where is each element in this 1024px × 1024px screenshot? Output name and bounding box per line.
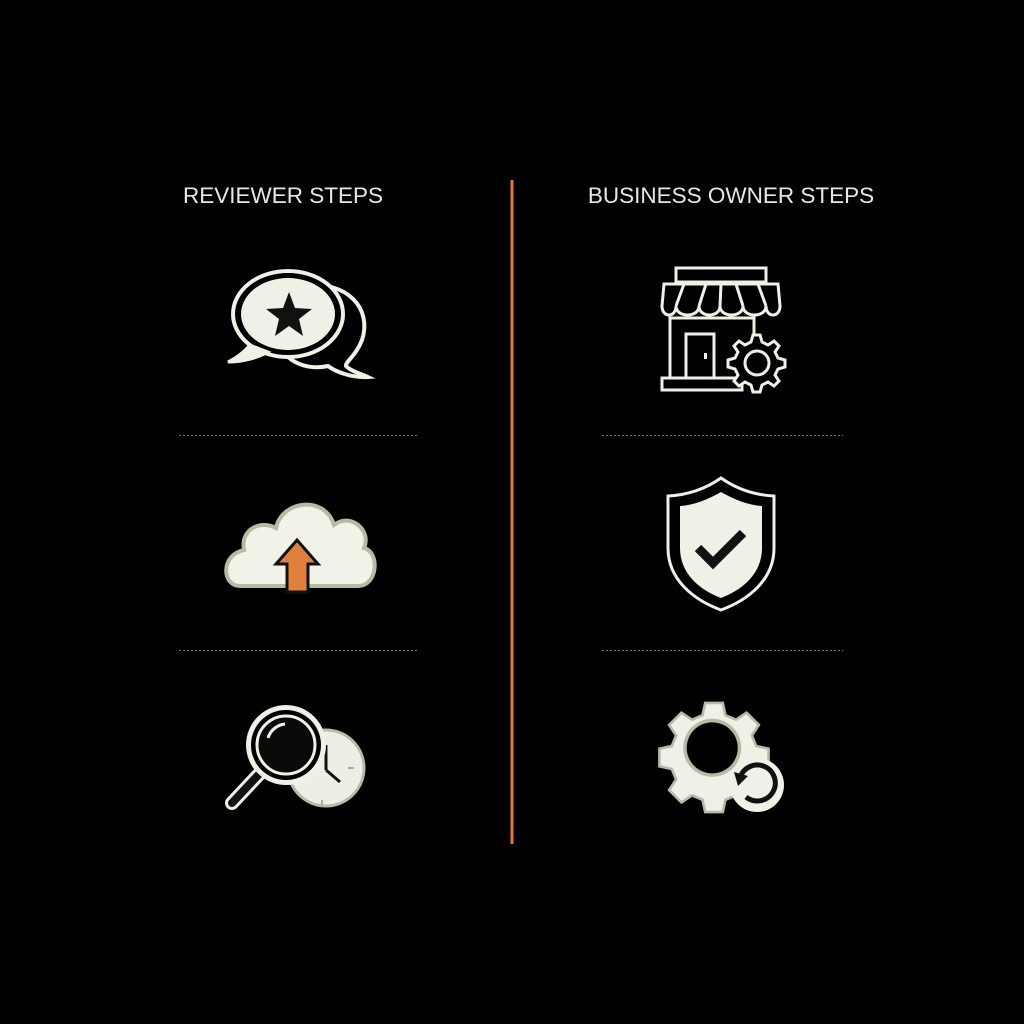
icon: magnifier with clock [232,705,364,806]
icon: cloud upload [226,505,375,592]
icon: shield with check [668,478,774,610]
icon: speech bubbles with star [228,271,368,377]
icon: gear with refresh [659,703,784,812]
heading: business owner steps: BUSINESS OWNER STEPS [588,183,874,208]
icon: storefront with gear [662,268,785,392]
heading: reviewer steps: REVIEWER STEPS [183,183,383,208]
divider: orange vertical line [510,180,514,844]
